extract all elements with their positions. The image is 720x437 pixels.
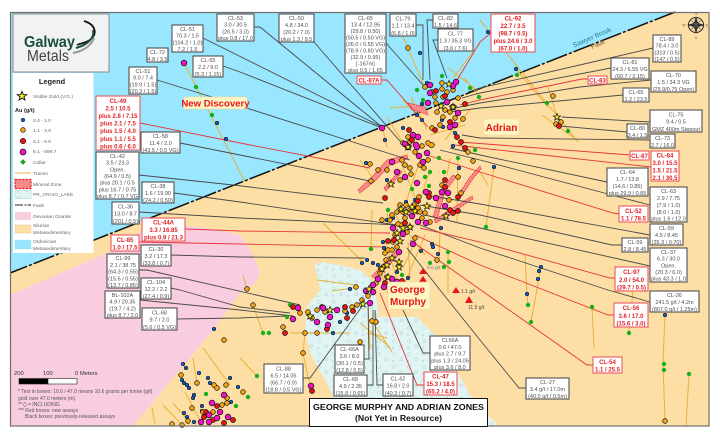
data box: CL-36: CL-36 xyxy=(118,204,133,210)
data box: CL-63: 2.9 / 7.75 xyxy=(657,196,680,202)
footnotes: Black boxes: previously-released assays xyxy=(25,414,116,420)
data box: CL-37: 6.3 / 30.0 xyxy=(657,257,680,263)
data box: CL-51 upper: 70.3 / 1.5 xyxy=(176,34,199,40)
data box: CL-38: (24.2 / 0.50) xyxy=(143,198,173,204)
data box: CL-51 lower xyxy=(129,67,157,95)
data box: CL-81: (60.7 / 2.15) xyxy=(615,74,645,80)
legend: collar: Collar xyxy=(33,160,46,166)
data box: CL-51 lower: (20.3 / 1.5) xyxy=(130,89,156,95)
data box: CL-64 xyxy=(607,168,648,197)
craig lake region xyxy=(305,262,498,426)
data box: CL-66A right xyxy=(430,336,470,371)
logo panel xyxy=(13,14,109,72)
data box: BL-102A xyxy=(105,291,140,319)
data box: CL-49: CL-49 xyxy=(110,99,127,105)
data box: CL-82: CL-82 xyxy=(438,16,453,22)
fault name label: Fault xyxy=(590,39,606,51)
compass rose: N xyxy=(695,12,698,16)
data box: CL-75 xyxy=(650,110,702,133)
legend: collar xyxy=(20,160,46,166)
data box: CL-66A right: plus 2.7 / 9.7 xyxy=(434,352,466,358)
data box: CL-99: (64.3 / 0.55) xyxy=(108,270,138,276)
data box: CL-64: 1.7 / 13.8 xyxy=(616,177,639,183)
data box: CL-68 lower xyxy=(334,375,367,397)
data box: CL-77: CL-77 xyxy=(448,31,463,37)
visible gold stars xyxy=(306,80,561,319)
data box: CL-92 xyxy=(491,14,535,53)
data box: CL-66A left xyxy=(335,345,364,374)
footnotes: ** () = INCLUDING xyxy=(18,402,60,408)
data box: CL-87A: CL-87A xyxy=(358,78,380,84)
data box: CL-55: CL-55 xyxy=(201,58,215,64)
data box: CL-104: (27.4 / 0.9) xyxy=(143,294,169,300)
data box: CL-37: (20.3 / 6.0) xyxy=(655,270,682,276)
data box: CL-58: 11.4 / 2.0 xyxy=(149,141,172,147)
data box: CL-99: CL-99 xyxy=(116,256,130,262)
data box: CL-88: (66.7 / 0.9) xyxy=(270,380,297,386)
data box: CL-73: CL-73 xyxy=(655,136,670,142)
data box: CL-104: CL-104 xyxy=(147,280,165,286)
footnotes xyxy=(18,389,153,420)
data box: CL-50: plus 1.3 / 9.5 xyxy=(281,37,312,43)
compass rose: S xyxy=(695,36,698,40)
legend: mineral zone xyxy=(15,180,62,188)
data box: CL-84: 1.5 / 21.5 xyxy=(652,168,678,174)
data box: CL-81 xyxy=(611,58,649,80)
data box: CL-65 upper: 13.4 / 12.95 xyxy=(351,22,380,28)
legend: devonian xyxy=(15,212,71,220)
data box: CL-66A right: CL66A xyxy=(442,338,459,344)
data box: CL-58 xyxy=(141,132,180,154)
data box: CL-30: CL-30 xyxy=(149,247,163,253)
legend panel: Legend xyxy=(39,77,66,86)
data box: CL-64: (14.6 / 0.85) xyxy=(613,184,642,190)
legend: traces xyxy=(15,171,48,177)
data box: CL-51 upper: (104.2 / 1.0) xyxy=(173,40,202,46)
data box: CL-68 lower: CL-68 xyxy=(343,377,358,383)
data box: CL-104 xyxy=(141,278,171,300)
assay points 1.1-3.0 xyxy=(172,48,665,425)
data box: CL-72: CL-72 xyxy=(150,50,165,56)
zone label: Adrian: Adrian xyxy=(486,123,517,134)
zone label: Adrian xyxy=(484,119,519,135)
data box: CL-75: GMZ 400m Stepout xyxy=(652,127,700,133)
data box: CL-62 xyxy=(383,374,413,397)
data box: CL-65 upper: (50.5 / 0.50 VG) xyxy=(346,35,385,41)
data box: CL-56: (15.6 / 3.0) xyxy=(616,322,646,328)
data box: CL-66A right: 0.6 / 47.0 xyxy=(439,345,461,351)
zone label: George Murphy: Murphy xyxy=(390,297,427,308)
data box: CL-70: 1.5 / 34.3 VG xyxy=(657,80,690,86)
logo panel: Metals xyxy=(27,48,69,65)
data box: CL-42 xyxy=(96,152,139,200)
zone label: New Discovery: New Discovery xyxy=(181,98,250,110)
data box: CL-66A right: plus 3.6 / 8.0 xyxy=(434,365,466,371)
data box: CL-59 upper: CL-59 xyxy=(659,226,674,232)
data box: CL-50 xyxy=(279,14,314,43)
data box: CL-84: 2.1 / 30.5 xyxy=(652,176,678,182)
legend: grade classes: 1.1 - 3.0 xyxy=(33,128,51,134)
data box: CL-27: 3.4 g/t / 17.0m xyxy=(530,387,565,393)
devonian granite region xyxy=(10,225,260,426)
data box: CL-37: Open. xyxy=(661,263,676,269)
data box: CL-59 upper xyxy=(650,224,683,246)
data box: CL-79: (6.8 / 1.0) xyxy=(391,31,415,37)
data box: CL-77: 1.3 / 35.3 VG xyxy=(439,39,472,45)
compass rose: E xyxy=(706,24,709,28)
footnotes: *** Red boxes: new assays xyxy=(18,408,79,414)
surface sample triangles: 11.5 g/t xyxy=(468,305,485,311)
data box: CL-88: (18.8 / 0.5 VG) xyxy=(265,388,302,394)
data box: BL-102A: 4.9 / 20.35 xyxy=(110,300,136,306)
data box: CL-56: CL-56 xyxy=(623,306,640,312)
fault line xyxy=(10,12,675,273)
legend: craig lake xyxy=(15,190,74,198)
data box: CL-49 xyxy=(96,96,140,150)
data box: CL-47 xyxy=(424,372,457,396)
data box: CL-87A xyxy=(357,76,381,84)
data box: CL-56 xyxy=(614,303,648,328)
data box: CL-59 upper: 4.5 / 8.45 xyxy=(655,233,678,239)
data box: CL-72: 4.8 / 3.5 xyxy=(148,57,167,63)
legend: silurian: Metasedimentary xyxy=(33,230,71,236)
data box: CL-49: plus 2.1 / 7.5 xyxy=(100,122,137,128)
assay points 0.4-1.0 xyxy=(182,32,665,422)
data box: CL-47: 15.3 / 18.5 xyxy=(426,382,455,388)
data box: CL-65 upper: [-167m] xyxy=(356,62,375,68)
legend: visible gold: Visible Gold (V.G.) xyxy=(33,94,73,100)
data box: CL-82: 1.5 / 14.6 xyxy=(434,23,457,29)
drill traces xyxy=(152,20,689,427)
data box: CL-87: CL-87 xyxy=(631,154,648,160)
data box: CL-70: CL-70 xyxy=(666,73,681,79)
data box: CL-55 xyxy=(193,56,223,78)
zone label: George Murphy: George xyxy=(390,285,425,296)
scale bar xyxy=(14,371,98,384)
data box: CL-44A: CL-44A xyxy=(153,221,175,227)
legend: devonian: Devonian Granite xyxy=(33,214,71,220)
logo swoosh xyxy=(73,21,95,53)
data box: CL-36: (201 / 0.5) xyxy=(113,219,138,225)
data box: CL-51 upper xyxy=(172,25,203,53)
legend: grade classes: 0.4 - 1.0 xyxy=(33,118,51,124)
legend: ordovician: Ordovician xyxy=(33,239,57,245)
legend: visible gold xyxy=(17,91,73,100)
data box: CL-84 xyxy=(651,151,679,182)
data box: CL-83 xyxy=(588,76,607,84)
data box: CL-62: (40.3 / 0.7) xyxy=(385,391,411,397)
data box: CL-54: 1.1 / 25.5 xyxy=(595,368,621,374)
data box: CL-47: (65.2 / 4.0) xyxy=(426,390,455,396)
footnotes: gold over 47.0 meters (m) xyxy=(18,396,76,402)
data box: CL-97: (29.7 / 0.5) xyxy=(617,286,646,292)
surface sample triangles: 1.1 g/t xyxy=(461,289,476,295)
data box: CL-63: (7.9 / 1.0) xyxy=(657,203,680,209)
data box: CL-37: CL-37 xyxy=(661,250,676,256)
surface sample triangles xyxy=(419,265,485,311)
data box: CL-65 upper: (78.9 / 0.80 VG) xyxy=(346,48,385,54)
data box: CL-38: CL-38 xyxy=(151,184,165,190)
data box: CL-44A: plus 0.9 / 21.3 xyxy=(144,236,184,242)
data box: CL-70: (25.9/0.75 Open) xyxy=(653,87,694,93)
data box: CL-42: 3.5 / 23.3 xyxy=(106,161,129,167)
data box: CL-55: 2.2 / 9.0 xyxy=(198,65,218,71)
data box: CL-80 xyxy=(627,124,648,139)
data box: CL-58: (43.5 / 0.5 VG) xyxy=(142,148,179,154)
data box: CL-65 lower: 1.2 / 23.5 xyxy=(625,97,647,103)
data box: CL-59 upper: (35.3 / 0.70) xyxy=(652,240,681,246)
data box: CL-36: 13.0 / 8.7 xyxy=(114,212,137,218)
compass rose xyxy=(682,12,709,40)
data box: CL-83: CL-83 xyxy=(589,78,606,84)
legend: silurian: Silurian xyxy=(33,223,50,229)
data box: CL-44A: 3.3 / 16.85 xyxy=(149,228,178,234)
data box: CL-42: plus 16.7 / 0.75 xyxy=(99,187,136,193)
data box: CL-27 xyxy=(526,378,569,400)
data box: CL-62: CL-62 xyxy=(391,376,405,382)
data box: CL-52: CL-52 xyxy=(625,209,642,215)
data box: CL-53: CL-53 xyxy=(228,16,243,22)
data box: CL-27: (40.0 g/t / 0.5m) xyxy=(528,394,567,400)
data box: CL-52: 1.1 / 78.5 xyxy=(621,217,647,223)
data box: CL-88: 6.5 / 14.05 xyxy=(270,373,296,379)
data box: CL-49: plus 2.8 / 7.15 xyxy=(98,114,138,120)
data box: CL-47: CL-47 xyxy=(432,375,449,381)
data box: CL-62: 16.8 / 2.0 xyxy=(387,384,409,390)
data box: CL-65 upper: (26.0 / 0.55 VG) xyxy=(346,42,385,48)
collars xyxy=(196,75,689,406)
legend: fault xyxy=(15,203,45,209)
data box: CL-42: plus 20.1 / 0.5 xyxy=(100,181,135,187)
data box: CL-37: plus 43.3 / 1.0 xyxy=(651,277,686,283)
data box: CL-97 xyxy=(615,267,648,292)
data box: CL-84: 3.0 / 15.5 xyxy=(652,161,678,167)
data box: CL-42: plus 8.7 / 0.7 VG xyxy=(97,194,138,200)
data box: CL-63 xyxy=(650,187,687,223)
data box: CL-49: plus 1.5 / 4.0 xyxy=(100,129,137,135)
legend: mineral zone: Mineral Zone xyxy=(33,182,62,188)
data box: CL-51 upper: CL-51 xyxy=(180,27,195,33)
data box: CL-50: 4.8 / 34.0 xyxy=(285,23,308,29)
data box: CL-81: 24.3 / 6.55 VG xyxy=(612,67,648,73)
title box xyxy=(310,398,488,426)
data box: CL-65 lower: CL-65 xyxy=(629,90,643,96)
legend: grade classes: 3.1 - 6.0 xyxy=(33,139,51,145)
data box: CL-42: (64.9 / 0.5) xyxy=(104,174,131,180)
data box: CL-26: 241.5 g/t / 4.2m xyxy=(655,300,694,306)
data box: CL-30 xyxy=(141,245,171,267)
data box: CL-88: CL-88 xyxy=(276,366,291,372)
data box: CL-50: (20.2 / 7.0) xyxy=(283,30,310,36)
data box: CL-53: (26.5 / 3.0) xyxy=(222,29,249,35)
data box: CL-26: CL-26 xyxy=(667,293,682,299)
data box: CL-89 xyxy=(653,35,681,63)
data box: CL-68 lower: (15.8 / 0.65) xyxy=(336,391,365,397)
compass rose: W xyxy=(682,24,686,28)
data box: CL-65 upper: (29.8 / 0.50) xyxy=(351,29,380,35)
scale bar: 100 xyxy=(43,371,53,377)
data box: CL-99: (13.7 / 0.85) xyxy=(108,283,138,289)
data box: CL-85: 1.0 / 17.5 xyxy=(112,246,138,252)
data box: CL-88 xyxy=(264,364,303,394)
data box: CL-68 upper: CL-68 xyxy=(152,310,167,316)
title box: (Not Yet in Resource) xyxy=(355,413,442,423)
data box: BL-102A: BL-102A xyxy=(112,293,134,299)
leader lines: previously released assays xyxy=(139,20,653,388)
data box: CL-104: 12.2 / 2.2 xyxy=(145,287,167,293)
data box: CL-82 xyxy=(433,14,458,29)
legend: ordovician xyxy=(15,239,71,252)
data box: CL-63: CL-63 xyxy=(661,189,676,195)
data box: CL-92: (67.0 / 1.0) xyxy=(498,47,528,53)
scale bar: 200 xyxy=(14,371,24,377)
data box: CL-30: (33.8 / 0.7) xyxy=(143,261,169,267)
data box: CL-79: 1.1 / 13.4 xyxy=(392,24,414,30)
data box: CL-51 lower: 9.0 / 7.4 xyxy=(133,76,153,82)
logo panel: Galway xyxy=(24,34,75,51)
data box: CL-89: (147 / 0.5) xyxy=(654,57,680,63)
data box: CL-51 lower: (19.9 / 1.5) xyxy=(130,82,156,88)
data box: CL-68 upper: (5.6 / 0.5 VG) xyxy=(143,325,176,331)
data box: CL-58: CL-58 xyxy=(153,134,168,140)
leader lines: new assays xyxy=(139,33,651,385)
data box: CL-92: plus 24.6 / 3.0 xyxy=(493,39,533,45)
zone label: George Murphy xyxy=(388,282,430,309)
assay points 3.1-6.0 xyxy=(204,91,559,423)
title box: GEORGE MURPHY AND ADRIAN ZONES xyxy=(313,402,484,412)
data box: CL-89: 78.4 / 3.0 xyxy=(656,44,678,50)
data box: CL-85 xyxy=(111,235,139,252)
data box: CL-42: Open. xyxy=(110,167,125,173)
data box: CL-59 lower: CL-59 xyxy=(628,240,642,246)
legend: ordovician: Metasedimentary xyxy=(33,246,71,252)
data box: CL-36 xyxy=(112,202,139,225)
data box: CL-63: plus 1.6 / 12.0 xyxy=(651,217,686,223)
data box: CL-38: 1.6 / 19.90 xyxy=(145,191,171,197)
data box: CL-59 lower xyxy=(622,238,648,253)
data box: CL-65 upper xyxy=(345,14,386,74)
data box: CL-54: CL-54 xyxy=(599,360,616,366)
data box: CL-26 xyxy=(650,291,699,313)
data box: CL-66A left: (12.8 / 0.5) xyxy=(336,368,363,374)
data box: CL-65 upper: plus 0.5 / 1.65 xyxy=(348,68,383,74)
data box: CL-81: CL-81 xyxy=(623,60,637,66)
data box: CL-63: (8.0 / 1.0) xyxy=(657,210,680,216)
data box: CL-89: (313 / 0.5) xyxy=(654,50,680,56)
legend panel: Au (g/t) xyxy=(15,108,35,114)
data box: CL-65 lower xyxy=(623,88,649,103)
data box: CL-68 upper xyxy=(142,308,177,331)
legend: silurian xyxy=(15,223,71,236)
data box: CL-73 xyxy=(650,134,675,149)
data box: CL-49: plus 0.6 / 6.0 xyxy=(100,144,137,150)
data box: CL-66A right: plus 1.3 / 24.05 xyxy=(431,358,469,364)
data box: CL-64: plus 29.9 / 0.85 xyxy=(609,191,646,197)
data box: CL-51 lower: CL-51 xyxy=(136,69,150,75)
data box: CL-68 upper: 9.7 / 2.0 xyxy=(150,318,169,324)
data box: CL-66A left: CL-66A xyxy=(340,347,359,353)
data box: CL-51 upper: 7.2 / 1.5 xyxy=(178,47,197,53)
data box: CL-97: CL-97 xyxy=(623,270,640,276)
data box: CL-66A left: (30.1 / 0.5) xyxy=(336,361,363,367)
data box: CL-53 xyxy=(217,14,254,42)
data box: CL-53: 3.0 / 30.5 xyxy=(224,23,247,29)
mineral zones xyxy=(358,103,481,279)
legend: fault: Fault xyxy=(33,203,45,209)
data box: CL-37 xyxy=(650,248,687,283)
data box: CL-92: (98.7 / 0.5) xyxy=(498,32,528,38)
data box: CL-30: 3.2 / 17.3 xyxy=(145,254,167,260)
data box: CL-70 xyxy=(651,71,696,93)
data box: CL-99 xyxy=(107,254,139,289)
data box: CL-99: (15.6 / 0.55) xyxy=(108,276,138,282)
legend: traces: Traces xyxy=(33,171,48,177)
data box: CL-38 xyxy=(142,182,174,204)
data box: CL-92: CL-92 xyxy=(505,17,522,23)
data box: CL-64: CL-64 xyxy=(620,170,635,176)
data box: CL-84: CL-84 xyxy=(657,154,674,160)
data box: CL-73: 2.7 / 16.0 xyxy=(651,143,674,149)
data box: CL-80: 3.4 / 1.5 xyxy=(628,133,647,139)
data box: CL-79: CL-79 xyxy=(396,16,410,22)
data box: CL-59 lower: 2.8 / 8.45 xyxy=(624,247,646,253)
data box: CL-26: (807.0 g/t / 1.25m) xyxy=(652,307,697,313)
data box: CL-77 xyxy=(438,29,473,52)
legend: grade classes xyxy=(20,118,57,155)
data box: CL-49: 2.5 / 10.5 xyxy=(105,106,131,112)
legend: craig lake: PR_CRAIG_LAKE xyxy=(33,192,74,198)
data box: CL-87 xyxy=(630,151,649,160)
data box: CL-42: CL-42 xyxy=(110,154,125,160)
data box: CL-56: 3.6 / 17.0 xyxy=(618,314,644,320)
data box: CL-65 upper: (32.9 / 0.95) xyxy=(351,55,380,61)
ordovician region xyxy=(10,12,675,273)
data box: CL-97: 2.0 / 54.0 xyxy=(619,278,645,284)
data box: CL-75: 9.4 / 0.5 xyxy=(666,120,686,126)
data box: CL-72 xyxy=(147,48,168,63)
assay points 6.1-899.7 xyxy=(184,63,458,422)
fault name label: Sawyer Brook xyxy=(572,26,613,49)
data box: CL-77: (3.6 / 7.6) xyxy=(444,46,467,52)
data box: CL-68 lower: 4.9 / 2.35 xyxy=(339,384,362,390)
legend panel xyxy=(13,73,94,253)
data box: CL-65 upper: CL-65 xyxy=(358,16,373,22)
scale bar: 0 Meters xyxy=(75,371,98,377)
data box: CL-75: CL-75 xyxy=(669,112,683,118)
data box: CL-99: 2.1 / 38.75 xyxy=(110,263,136,269)
data box: BL-102A: plus 8.7 / 2.0 xyxy=(107,313,138,319)
data box: CL-49: plus 1.1 / 5.5 xyxy=(100,137,137,143)
data box: CL-50: CL-50 xyxy=(289,16,304,22)
footnotes: * Text in boxes: 10.6 / 47.0 means 10.6 grams per tonne (g/t) xyxy=(18,389,153,395)
data box: CL-53: plus 0.8 / 17.0 xyxy=(218,36,253,42)
data box: CL-89: CL-89 xyxy=(660,37,674,43)
data box: CL-55: (5.3 / 1.15) xyxy=(195,72,221,78)
data box: BL-102A: (19.7 / 4.2) xyxy=(109,306,136,312)
legend: grade classes: 6.1 - 899.7 xyxy=(33,149,57,155)
data box: CL-54 xyxy=(593,357,622,374)
surface sample triangles: 8.0 g/t xyxy=(427,265,441,271)
data box: CL-92: 22.7 / 3.5 xyxy=(500,24,526,30)
data box: CL-27: CL-27 xyxy=(540,380,555,386)
data box: CL-52 xyxy=(619,206,648,223)
data box: CL-85: CL-85 xyxy=(117,238,134,244)
data box: CL-66A left: 3.6 / 8.0 xyxy=(340,354,359,360)
data box: CL-80: CL-80 xyxy=(630,126,645,132)
data box: CL-79 xyxy=(390,14,416,37)
data box: CL-44A xyxy=(142,218,185,242)
